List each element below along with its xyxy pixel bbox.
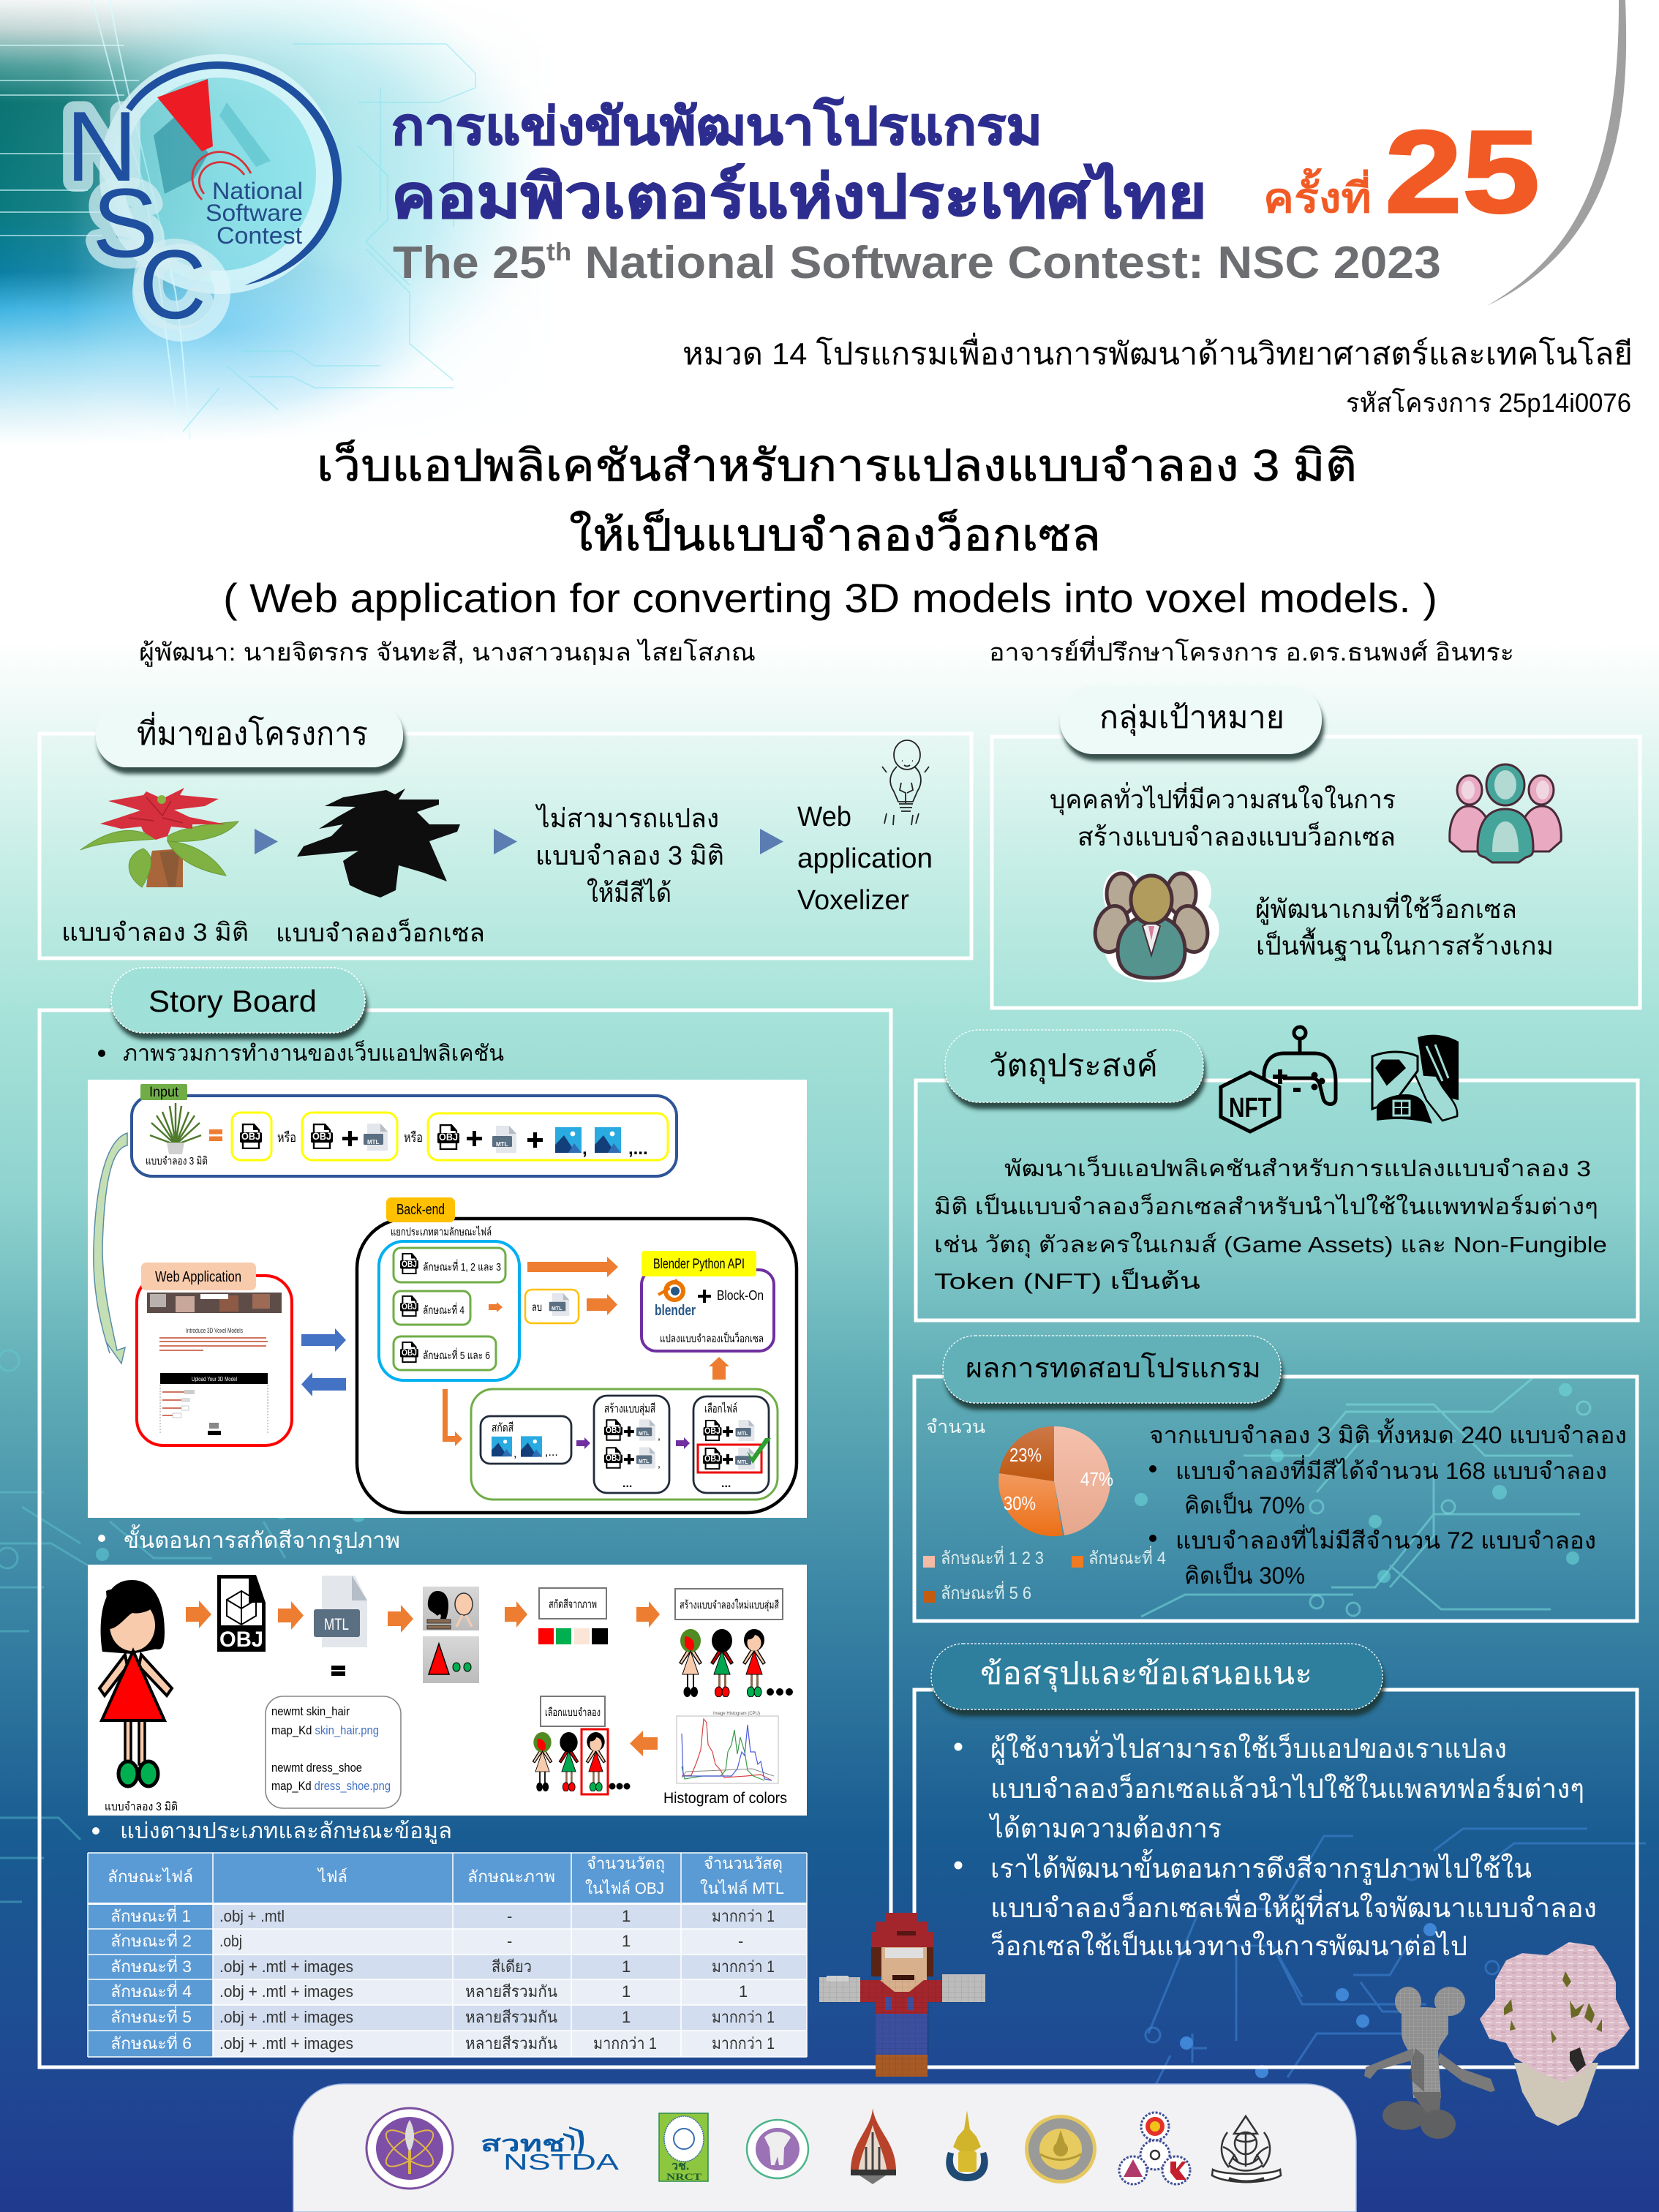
footer panel with sponsor logos (293, 2084, 1356, 2212)
table: file characteristics: - (507, 1907, 512, 1925)
heading: objective: วัตถุประสงค์ (989, 1048, 1158, 1085)
header swoosh (1487, 0, 1626, 306)
text box: mtl code: newmt skin_hair (271, 1704, 350, 1718)
logo: Silpakorn University (1212, 2116, 1281, 2182)
text: objective description (934, 1155, 1607, 1294)
back-end group: ลักษณะที่ 1, 2 และ 3 (423, 1259, 501, 1274)
heading: story board (111, 968, 365, 1033)
table: file characteristics: - (738, 1932, 743, 1950)
table: file characteristics: ไฟล์ (317, 1867, 347, 1886)
chart: histogram of colours (663, 1712, 787, 1807)
step: random colour models: สร้างแบบจำลองใหม่แบบสุ่มสี (680, 1598, 779, 1612)
contest title: การแข่งขันพัฒนาโปรแกรม (391, 97, 1042, 155)
logo: NSC: Software (206, 200, 303, 226)
input group: OBJ (312, 1130, 331, 1142)
back-end group: OBJ (704, 1426, 721, 1436)
text: cannot convert colour: แบบจำลอง 3 มิติ (535, 840, 724, 870)
step: extract colours: สกัดสีจากภาพ (549, 1598, 597, 1611)
project title (223, 440, 1437, 621)
chart: pie: 47% (1080, 1468, 1113, 1490)
table: file characteristics: ลักษณะที่ 1 (110, 1905, 191, 1925)
logo: ministry seal (366, 2108, 453, 2189)
table: file characteristics: 1 (622, 1932, 631, 1950)
step: random colour models (675, 1589, 793, 1697)
table: file characteristics: มากกว่า 1 (712, 1957, 775, 1976)
back-end group: เลือกไฟล์ (704, 1402, 737, 1415)
text: result summary (1149, 1418, 1627, 1589)
text: objective description: Token (NFT) เป็นต้น (934, 1268, 1200, 1294)
category and project code: รหัสโครงการ 25p14i0076 (1346, 388, 1631, 418)
contest title: คอมพิวเตอร์แห่งประเทศไทย (391, 162, 1207, 230)
text: result summary: คิดเป็น 30% (1184, 1562, 1305, 1589)
text: conclusions: แบบจำลองว็อกเซลเพื่อให้ผู้ที่สนใจพัฒนาแบบจำลอง (990, 1889, 1597, 1925)
panel: project origin (40, 704, 971, 958)
icon: group of people (1450, 764, 1561, 862)
icon: NFT hexagon: NFT (1229, 1093, 1271, 1124)
logo: NSTDA: NSTDA (503, 2149, 619, 2175)
contest title: ครั้งที่ (1263, 168, 1372, 221)
icon: idea light bulb (882, 740, 929, 825)
table: file characteristics: ลักษณะที่ 3 (110, 1955, 192, 1976)
back-end group: MTL (639, 1432, 650, 1437)
chart: pie: 30% (1004, 1492, 1036, 1514)
text: objective description: พัฒนาเว็บแอปพลิเคชันสำหรับการแปลงแบบจำลอง 3 (1004, 1155, 1591, 1181)
table: file characteristics: 1 (622, 1982, 631, 2001)
text: conclusions: ผู้ใช้งานทั่วไปสามารถใช้เว็บแอปของเราแปลง (990, 1729, 1507, 1765)
table: file characteristics: สีเดียว (492, 1957, 532, 1976)
back-end group: Block-On (717, 1288, 764, 1303)
table: file characteristics: หลายสีรวมกัน (465, 2008, 557, 2026)
logo: NRCT: วช. (672, 2160, 689, 2172)
table: file characteristics: .obj + .mtl + images (219, 2034, 353, 2053)
chart: pie: 23% (1009, 1444, 1042, 1466)
table: file characteristics: .obj + .mtl + images (219, 1982, 353, 2001)
table: file characteristics: จำนวนวัตถุ (587, 1854, 665, 1873)
table: file characteristics: ในไฟล์ MTL (700, 1879, 784, 1897)
web application group: Upload Your 3D Model (192, 1376, 237, 1382)
diagram: web application overview (88, 1080, 807, 1518)
input group (132, 1084, 677, 1176)
panel: target group (992, 685, 1640, 1008)
table: file characteristics: มากกว่า 1 (712, 1907, 775, 1925)
back-end group (357, 1197, 797, 1513)
logo: NRCT: NRCT (666, 2171, 701, 2182)
back-end group: , (658, 1430, 661, 1442)
logo: NSC: National (212, 178, 303, 204)
table: file characteristics: ลักษณะไฟล์ (108, 1867, 193, 1886)
circuit pattern: conclusion area (1146, 1829, 1646, 2085)
text: game developers (1255, 892, 1554, 961)
voxel character: Mickey (1364, 1987, 1495, 2139)
icon: black voxel plant (297, 789, 460, 898)
panel: objective (916, 1027, 1638, 1320)
arrow (494, 829, 517, 854)
table: file characteristics: หลายสีรวมกัน (465, 1982, 557, 2001)
icon: 3D plant model (80, 788, 238, 887)
back-end group: ลักษณะที่ 5 และ 6 (423, 1347, 490, 1362)
back-end group: Back-end (396, 1202, 445, 1218)
icon: NFT hexagon (1221, 1072, 1279, 1132)
heading: story board: Story Board (148, 984, 317, 1018)
chart: pie (926, 1417, 1113, 1536)
developers and advisor (139, 636, 1514, 667)
logo: NSC: N (66, 91, 138, 202)
table: file characteristics: ลักษณะภาพ (467, 1867, 555, 1886)
header corner artwork (0, 0, 532, 439)
orange flow arrows (186, 1600, 660, 1756)
back-end group: OBJ (402, 1301, 417, 1312)
icon: MTL file (314, 1576, 367, 1647)
input group: , (582, 1139, 587, 1159)
bullet: colour extraction: ขั้นตอนการสกัดสีจากรูปภาพ (124, 1524, 400, 1554)
caption: 3D model: แบบจำลอง 3 มิติ (61, 919, 249, 947)
web application group: Web Application (155, 1269, 241, 1285)
table: file characteristics: .obj + .mtl (219, 1907, 285, 1925)
input group: MTL (367, 1139, 380, 1146)
text box: mtl code: map_Kd dress_shoe.png (271, 1779, 391, 1793)
input group: ,... (628, 1139, 648, 1159)
logo: NSC (66, 61, 342, 339)
logo: gold circular seal (1025, 2115, 1096, 2183)
input group: OBJ (241, 1130, 260, 1142)
chart legend: ลักษณะที่ 5 6 (941, 1581, 1031, 1603)
circuit pattern: results area (1135, 1375, 1590, 1617)
contest title (391, 97, 1540, 288)
input group: MTL (496, 1141, 508, 1148)
heading: project origin (96, 704, 403, 767)
project title: ( Web application for converting 3D models into voxel models. ) (223, 575, 1437, 621)
back-end group: แยกประเภทตามลักษณะไฟล์ (391, 1225, 492, 1238)
text: result summary: คิดเป็น 70% (1184, 1491, 1305, 1519)
caption: voxel model: แบบจำลองว็อกเซล (276, 918, 485, 947)
letter halos (66, 91, 206, 339)
table: file characteristics: 1 (622, 1907, 631, 1925)
table: file characteristics: มากกว่า 1 (712, 2034, 775, 2053)
web application group: Introduce 3D Voxel Models (186, 1327, 243, 1334)
equals sign (331, 1666, 345, 1676)
logo: three gears (1119, 2113, 1190, 2184)
chart: histogram of colours: Histogram of colors (663, 1790, 787, 1807)
project title: ให้เป็นแบบจำลองว็อกเซล (569, 509, 1101, 560)
project title: เว็บแอปพลิเคชันสำหรับการแปลงแบบจำลอง 3 มิติ (317, 440, 1357, 490)
back-end group: ลบ (532, 1301, 542, 1314)
panel: test results (914, 1336, 1637, 1621)
letter halos: C (139, 230, 206, 339)
panel: story board (40, 968, 891, 2067)
table: file characteristics: 1 (739, 1982, 748, 2001)
contest title: 25 (1385, 106, 1540, 237)
category and project code (682, 333, 1633, 418)
text box: mtl code: map_Kd skin_hair.png (271, 1723, 379, 1737)
letter halos: S (92, 169, 158, 278)
back-end group: OBJ (402, 1347, 417, 1358)
back-end group: OBJ (402, 1259, 417, 1269)
table: file characteristics: .obj + .mtl + images (219, 1957, 353, 1976)
back-end group: สร้างแบบสุ่มสี (604, 1402, 655, 1416)
text: cannot convert colour (535, 803, 724, 908)
diagram: colour extraction steps (88, 1565, 807, 1816)
text box: mtl code (266, 1696, 401, 1808)
back-end group: สกัดสี (492, 1421, 514, 1434)
contest title: The 25 (393, 238, 536, 288)
table: file characteristics: มากกว่า 1 (712, 2008, 775, 2026)
input group: แบบจำลอง 3 มิติ (146, 1155, 208, 1167)
chart legend: ลักษณะที่ 1 2 3 (941, 1546, 1044, 1568)
heading: project origin: ที่มาของโครงการ (137, 711, 368, 752)
back-end group: blender (655, 1303, 696, 1319)
table: file characteristics: ลักษณะที่ 4 (110, 1980, 192, 2001)
back-end group: แปลงแบบจำลองเป็นว็อกเซล (660, 1331, 764, 1345)
logo: NSTDA (481, 2126, 619, 2175)
logo: NSC: C (139, 230, 206, 339)
logo: Chiang Mai University (747, 2120, 808, 2178)
table: file characteristics (88, 1853, 807, 2057)
chart: pie: จำนวน (926, 1417, 985, 1437)
heading: target group (1060, 685, 1322, 754)
table: file characteristics: ลักษณะที่ 5 (110, 2006, 192, 2026)
step: select model (533, 1696, 631, 1794)
text: general users (1050, 782, 1396, 851)
table: file characteristics: ลักษณะที่ 2 (110, 1930, 192, 1950)
table: file characteristics: มากกว่า 1 (593, 2034, 657, 2053)
logo: NRCT (659, 2113, 708, 2182)
girl model: แบบจำลอง 3 มิติ (105, 1801, 178, 1813)
back-end group: ... (622, 1478, 632, 1490)
developers and advisor: ผู้พัฒนา: นายจิตรกร จันทะสี, นางสาวนฤมล ไสยโสภณ (139, 639, 756, 667)
back-end group: , (514, 1448, 516, 1460)
step: select model: เลือกแบบจำลอง (545, 1707, 601, 1719)
table: file characteristics: - (507, 1932, 512, 1950)
text: Web application Voxelizer: application (797, 843, 933, 874)
icon: game assets (1372, 1035, 1459, 1124)
arrow (760, 829, 783, 854)
table: file characteristics: 1 (622, 1957, 631, 1976)
text: result summary: จากแบบจำลอง 3 มิติ ทั้งหมด 240 แบบจำลอง (1149, 1418, 1627, 1448)
heading: test results: ผลการทดสอบโปรแกรม (966, 1352, 1261, 1384)
text: game developers: ผู้พัฒนาเกมที่ใช้ว็อกเซล (1255, 892, 1517, 925)
logo halo ring (111, 66, 328, 334)
input group: Input (149, 1085, 179, 1100)
text box: mtl code: newmt dress_shoe (271, 1761, 362, 1775)
heading: objective (945, 1030, 1203, 1102)
table: file characteristics: 1 (622, 2008, 631, 2026)
icon: game developer (1090, 870, 1219, 982)
text: result summary: แบบจำลองที่ไม่มีสีจำนวน 72 แบบจำลอง (1175, 1524, 1596, 1554)
input group: หรือ (404, 1130, 423, 1145)
back-end group: Blender Python API (653, 1257, 745, 1272)
back-end group: MTL (639, 1459, 650, 1464)
back-end group: MTL (737, 1460, 748, 1465)
input group: หรือ (277, 1130, 296, 1145)
text: general users: สร้างแบบจำลองแบบว็อกเซล (1077, 821, 1396, 851)
bullet: overview: ภาพรวมการทำงานของเว็บแอปพลิเคชัน (123, 1039, 504, 1066)
text: Web application Voxelizer: Web (797, 802, 851, 832)
text: conclusions: ว็อกเซลใช้เป็นแนวทางในการพัฒนาต่อไป (990, 1929, 1467, 1961)
web application group (137, 1263, 292, 1445)
back-end group: ... (721, 1478, 731, 1490)
icon: OBJ file (217, 1575, 266, 1652)
girl model (99, 1580, 178, 1813)
developers and advisor: อาจารย์ที่ปรึกษาโครงการ อ.ดร.ธนพงศ์ อินทระ (989, 636, 1514, 666)
step: extract colours (538, 1588, 608, 1644)
back-end group: MTL (737, 1432, 748, 1437)
text: result summary: แบบจำลองที่มีสีได้จำนวน 168 แบบจำลอง (1175, 1455, 1607, 1484)
text: general users: บุคคลทั่วไปที่มีความสนใจในการ (1050, 782, 1396, 815)
table: file characteristics: ลักษณะที่ 6 (110, 2032, 192, 2053)
text: Web application Voxelizer: Voxelizer (797, 885, 909, 916)
text: objective description: เช่น วัตถุ ตัวละครในเกมส์ (Game Assets) และ Non-Fungible (934, 1232, 1607, 1259)
logo: NSC: S (92, 169, 158, 278)
back-end group: ลักษณะที่ 4 (423, 1302, 464, 1317)
text: objective description: มิติ เป็นแบบจำลองว็อกเซลสำหรับนำไปใช้ในแพทฟอร์มต่างๆ (934, 1193, 1598, 1219)
text: cannot convert colour: ไม่สามารถแปลง (535, 803, 719, 833)
text: conclusions: แบบจำลองว็อกเซลแล้วนำไปใช้ในแพลทฟอร์มต่างๆ (990, 1772, 1584, 1804)
heading: conclusion: ข้อสรุปและข้อเสนอแนะ (980, 1656, 1312, 1693)
logo: Prince of Songkla University (946, 2110, 988, 2181)
category and project code: หมวด 14 โปรแกรมเพื่องานการพัฒนาด้านวิทยาศาสตร์และเทคโนโลยี (682, 333, 1633, 371)
text: conclusions: ได้ตามความต้องการ (988, 1813, 1222, 1843)
letter halos: N (66, 91, 138, 202)
logo: NSC: Contest (217, 222, 302, 249)
voxel character: Mario (819, 1913, 985, 2077)
icon: OBJ file: OBJ (219, 1628, 263, 1652)
back-end group: ,... (545, 1446, 558, 1459)
curved arrow: input to web app (94, 1133, 127, 1363)
table: file characteristics: ในไฟล์ OBJ (585, 1879, 664, 1897)
arrows: request and response (301, 1328, 346, 1396)
table: file characteristics: หลายสีรวมกัน (465, 2034, 557, 2053)
text: conclusions: เราได้พัฒนาขั้นตอนการดึงสีจากรูปภาพไปใช้ใน (990, 1848, 1532, 1885)
texture tiles (423, 1587, 479, 1683)
back-end group: OBJ (704, 1453, 721, 1464)
back-end group: OBJ (606, 1453, 621, 1463)
back-end group: , (658, 1458, 661, 1470)
circuit pattern: left side (0, 1350, 365, 1902)
table: file characteristics: .obj + .mtl + images (219, 2008, 353, 2026)
voxel flower in vase (1480, 1942, 1630, 2126)
logo: NSTDA: สวทช (481, 2132, 565, 2156)
panel: conclusion (914, 1644, 1637, 2067)
logo: red spire university (851, 2108, 896, 2184)
table: file characteristics: จำนวนวัสดุ (704, 1854, 783, 1873)
icon: MTL file: MTL (324, 1615, 349, 1633)
back-end group: MTL (552, 1306, 563, 1312)
heading: conclusion (931, 1644, 1382, 1709)
arrow (255, 829, 278, 854)
input group: OBJ (439, 1131, 458, 1143)
chart legend: ลักษณะที่ 4 (1088, 1546, 1166, 1568)
text: Web application Voxelizer (797, 802, 933, 916)
bullet: data categories: แบ่งตามประเภทและลักษณะข้อมูล (120, 1819, 452, 1844)
text: game developers: เป็นพื้นฐานในการสร้างเกม (1256, 927, 1554, 961)
contest title: th (546, 238, 571, 266)
text: cannot convert colour: ให้มีสีได้ (587, 878, 672, 908)
icon: game controller (1264, 1027, 1336, 1105)
chart: histogram of colours: Image Histogram (CPU) (713, 1712, 760, 1716)
heading: target group: กลุ่มเป้าหมาย (1099, 700, 1284, 737)
text: conclusions (954, 1729, 1597, 1961)
contest title: National Software Contest: NSC 2023 (571, 238, 1441, 288)
back-end group: OBJ (606, 1425, 621, 1435)
chart legend (923, 1546, 1166, 1603)
heading: test results (943, 1336, 1281, 1403)
table: file characteristics: .obj (219, 1932, 242, 1950)
